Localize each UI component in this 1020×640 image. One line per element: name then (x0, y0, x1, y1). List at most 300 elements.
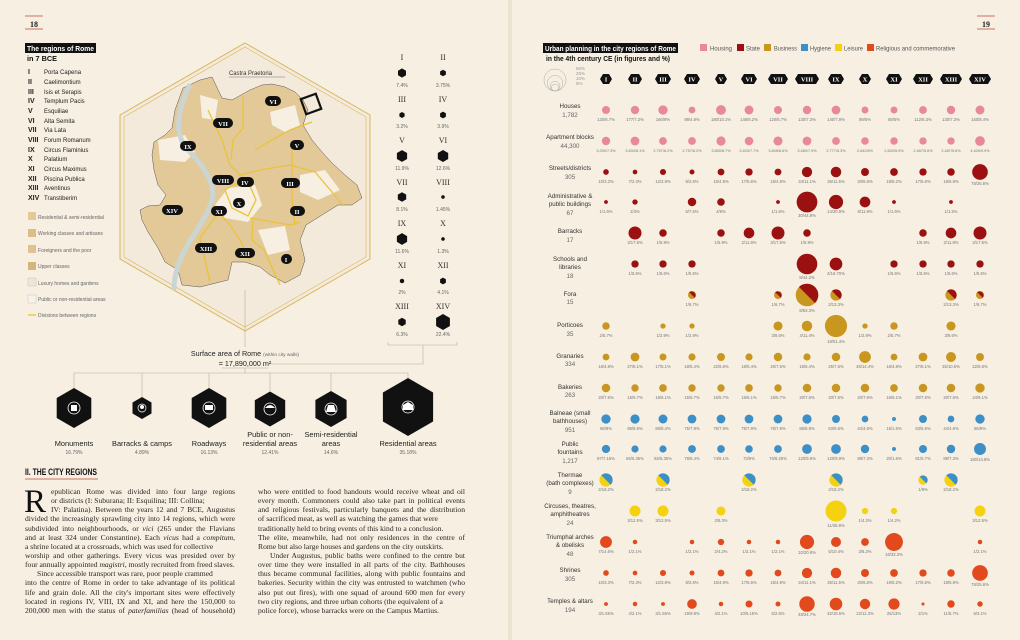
text column 2: and religious festivals, particularly banquets and the distribution (258, 505, 465, 514)
row: public fountains: 20/1.6% (886, 456, 902, 461)
row: bakeries: 20/7.6% (598, 395, 614, 400)
row labels: & obelisks (556, 542, 584, 549)
legend: region names: Isis et Serapis (44, 90, 82, 96)
row: schools: 1/5.6% (685, 271, 699, 276)
row: barracks: 2/11.8% (741, 240, 757, 245)
row: temples: 4/2.1% (628, 611, 642, 616)
row labels: Balneae (small (550, 410, 590, 417)
region share hexagons (395, 53, 451, 338)
row: schools: 3/16.70% (827, 271, 845, 276)
region share hexagons: 11.9% (395, 166, 409, 172)
row: shrines: 20/6.6% (857, 580, 873, 585)
land use hexagons: Semi-residential (304, 430, 358, 439)
row: fora (685, 284, 987, 313)
land use hexagons: 35.18% (400, 450, 417, 456)
row: triumphal arches: 16/33.3% (885, 552, 903, 557)
legend: region names: IX (28, 147, 35, 154)
row: bakeries: 15/5.7% (713, 395, 729, 400)
row labels: 24 (567, 520, 574, 527)
row: triumphal arches (598, 533, 987, 557)
legend: region names: Templum Pacis (44, 99, 85, 105)
row: houses: 140/7.9% (827, 117, 845, 122)
row: administrative: 2/3% (630, 209, 640, 214)
row: apartment blocks: 3,480/7.9% (797, 149, 817, 153)
size legend circles (544, 66, 585, 91)
legend: land use swatches: Public or non-residential areas (38, 297, 106, 303)
row: bakeries: 20/7.6% (857, 395, 873, 400)
text column 1: worship and other gatherings. Every vicus was presided over by (25, 551, 235, 560)
row labels: 263 (565, 392, 576, 399)
text column 1: four annually appointed magistri, mostly recruited from freed slaves. (25, 560, 235, 569)
row: schools: 1/5.6% (656, 271, 670, 276)
land use hexagons: 12.41% (262, 450, 279, 456)
legend: region names (28, 69, 91, 202)
text column 1: divided the increasingly sprawling city into 14 regions, which were (25, 514, 235, 523)
text column 1: life and grain dole. All the city's important sites were effectively (25, 588, 235, 597)
row: administrative: 8/11.9% (857, 209, 873, 214)
row: public fountains: 74/6.1% (713, 456, 729, 461)
row: schools (628, 254, 987, 280)
row: shrines: 35/11.5% (827, 580, 845, 585)
text column 1: 200,000 men with the status of paterfamilias (head of household) (25, 606, 235, 615)
row: administrative: 5/7.5% (685, 209, 699, 214)
row: public fountains: 73/6% (743, 456, 755, 461)
legend: land use swatches: Luxury homes and gardens (38, 281, 99, 287)
row: fora: 1/6.7% (771, 302, 785, 307)
row: barracks: 1/5.9% (656, 240, 670, 245)
row: granaries: 35/10.5% (942, 364, 960, 369)
row: bakeries: 20/7.6% (943, 395, 959, 400)
row: thermae: 2/18.2% (741, 487, 757, 492)
row: streets: 15/4.9% (713, 179, 729, 184)
region header badges: VIII (801, 76, 814, 84)
row labels: 951 (565, 427, 576, 434)
row: shrines: 8/2.6% (685, 580, 699, 585)
row: barracks (627, 226, 988, 245)
text column 2 (258, 487, 466, 615)
row: balneae: 85/8.9% (799, 426, 815, 431)
region share hexagons: VIII (436, 178, 450, 187)
row: public fountains (597, 443, 990, 462)
row: temples: 25/13% (887, 611, 901, 616)
row labels: Fora (564, 291, 577, 298)
row labels: Triumphal arches (546, 534, 594, 541)
legend: region names: Porta Capena (44, 70, 82, 76)
row: shrines: 17/5.6% (915, 580, 931, 585)
row labels: Houses (560, 103, 580, 110)
row: shrines: 19/6.2% (886, 580, 902, 585)
legend: region names: II (28, 79, 32, 86)
row: streets: 7/2.3% (628, 179, 642, 184)
region header badges (600, 74, 991, 84)
text column 2: over time they were installed in all parts of the city. Bathhouses (258, 560, 465, 569)
row: public fountains: 120/9.9% (827, 456, 845, 461)
row: triumphal arches: 7/14.6% (598, 549, 614, 554)
row: porticoes: 2/5.7% (887, 333, 901, 338)
region header badges: X (863, 76, 868, 84)
region share hexagons: IV (439, 95, 447, 104)
region header badges: VII (773, 76, 783, 84)
drop cap: R (24, 484, 46, 520)
map of Rome in hexagon: II (294, 209, 300, 216)
legend: region names: Circus Maximus (44, 167, 87, 173)
map of Rome in hexagon: IX (184, 144, 192, 151)
legend: region names: Aventinus (44, 186, 70, 192)
legend: land use swatches: Working classes and artisans (38, 231, 103, 237)
region share hexagons: 1.45% (436, 207, 451, 213)
land use hexagons: Monuments (55, 439, 94, 448)
legend: region names: XIV (28, 195, 40, 202)
row: porticoes: 18/51.4% (827, 339, 845, 344)
legend: land use swatches: Residential & semi-residential (38, 215, 104, 221)
row labels: amphitheatres (550, 511, 590, 518)
row labels: Schools and (553, 256, 588, 263)
row: temples: 11/5.7% (943, 611, 959, 616)
row: temples: 32/16.5% (827, 611, 845, 616)
row labels: 48 (567, 551, 574, 558)
row: temples: 22/11.3% (856, 611, 874, 616)
row: triumphal arches: 1/2.1% (973, 549, 987, 554)
legend: region names: V (28, 108, 33, 115)
region header badges: V (719, 76, 724, 84)
row: fora: 1/6.7% (685, 302, 699, 307)
icon hex: barracks (132, 397, 152, 419)
row: shrines: 78/25.6% (971, 582, 989, 587)
row labels: Thermae (558, 472, 583, 479)
row: bakeries: 20/7.6% (915, 395, 931, 400)
row: circuses (627, 501, 988, 528)
row: streets: 20/6.6% (857, 179, 873, 184)
row labels: 305 (565, 576, 576, 583)
legend: region names: Caelimontium (44, 80, 81, 86)
text column 2: of sacrificed meat, as well as watching the games that were (258, 514, 438, 523)
text column 1: located in regions IV, VIII, IX and XI, and here the 150,000 to (25, 597, 235, 606)
size legend circles: 50% (576, 66, 585, 71)
region header badges: I (605, 76, 608, 84)
legend: region names: IV (28, 98, 35, 105)
legend: region names: X (28, 156, 33, 163)
region share hexagons: X (440, 219, 446, 228)
surface area label: Surface area of Rome (within city walls) (191, 349, 300, 358)
land use hexagons: Barracks & camps (112, 439, 172, 448)
row labels: 44,300 (561, 143, 580, 150)
row: balneae: 75/7.9% (741, 426, 757, 431)
row: public fountains: 76/6.25% (769, 456, 787, 461)
icon hex: residential (383, 378, 433, 436)
region share hexagons: 4.1% (437, 290, 449, 296)
region share hexagons: VII (396, 178, 408, 187)
row: streets: 15/4.9% (770, 179, 786, 184)
row: streets: 35/11.5% (827, 179, 845, 184)
row: bakeries: 24/9.1% (972, 395, 988, 400)
row: triumphal arches: 2/4.2% (714, 549, 728, 554)
row: public fountains: 65/5.35% (654, 456, 672, 461)
row: public fountains: 180/14.8% (970, 457, 990, 462)
row: apartment blocks: 3,403/7.7% (739, 149, 759, 153)
colour legend: Housing (710, 46, 732, 52)
right page title: Urban planning in the city regions of Rome (545, 44, 676, 53)
page number 18 (25, 16, 43, 29)
row: barracks: 1/5.9% (800, 240, 814, 245)
size legend circles: 5% (576, 81, 583, 86)
row labels: Bakeries (558, 384, 582, 391)
row labels: (bath complexes) (546, 480, 594, 487)
row labels: 1,782 (562, 112, 578, 119)
row: temples (598, 596, 987, 617)
row: temples: 5/2.6% (771, 611, 785, 616)
row: bakeries: 15/5.7% (627, 395, 643, 400)
row: balneae (600, 414, 986, 431)
row labels: Barracks (558, 228, 582, 235)
row: granaries: 27/8.1% (915, 364, 931, 369)
row: administrative: 1/1.5% (887, 209, 901, 214)
row: houses: 89/5% (888, 117, 900, 122)
row: balneae: 85/8.9% (627, 426, 643, 431)
row: apartment blocks: 2,642/6% (857, 149, 874, 153)
row: streets: 78/25.6% (971, 181, 989, 186)
row: houses: 120/6.7% (769, 117, 787, 122)
row: bakeries: 20/7.6% (828, 395, 844, 400)
row: barracks: 3/17.6% (627, 240, 643, 245)
legend: region names: III (28, 89, 34, 96)
row: apartment blocks (596, 136, 990, 153)
region share hexagons: 3.75% (436, 83, 451, 89)
row: apartment blocks: 2,757/6.2% (682, 149, 702, 153)
row labels: 18 (567, 273, 574, 280)
icon hex: public areas (255, 392, 285, 426)
row labels: 9 (568, 489, 572, 496)
legend: region names: VI (28, 118, 35, 125)
text column 1: Since accessible transport was rare, poor people crammed (37, 569, 213, 578)
row: houses: 130/7.3% (942, 117, 960, 122)
colour legend: Leisure (844, 46, 864, 52)
row labels (544, 103, 596, 614)
region share hexagons: I (401, 53, 404, 62)
row labels: 194 (565, 607, 576, 614)
icon hex: roadways (192, 388, 226, 428)
legend: land use swatches: Divisions between regions (38, 313, 97, 319)
row: porticoes: 4/11.4% (799, 333, 815, 338)
row labels: Administrative & (548, 193, 593, 200)
row: triumphal arches: 3/6.2% (858, 549, 872, 554)
row: shrines (598, 565, 989, 587)
row: shrines: 15/4.9% (770, 580, 786, 585)
row: temples: 6/3.1% (973, 611, 987, 616)
row: schools: 1/5.6% (944, 271, 958, 276)
section heading (25, 467, 98, 479)
legend: region names: Palatium (44, 157, 67, 163)
row labels: 1,217 (562, 458, 578, 465)
text column 2: bakeries. Security within the city was entrusted to watchmen (who (258, 578, 465, 587)
land use hexagons: 16.13% (201, 450, 218, 456)
map of Rome in hexagon: XII (240, 251, 250, 258)
region share hexagons: III (398, 95, 406, 104)
row: thermae: 2/18.2% (598, 487, 614, 492)
row: fora: 1/6.7% (973, 302, 987, 307)
row: streets: 17/5.6% (915, 179, 931, 184)
row: schools: 1/5.6% (916, 271, 930, 276)
surface area label: = 17,890,000 m² (219, 359, 272, 368)
row: porticoes (599, 315, 958, 344)
row: barracks: 2/11.8% (943, 240, 959, 245)
legend: region names: VII (28, 127, 37, 134)
text column 2: police force), whose barracks were on the Campus Martius. (258, 606, 439, 615)
map of Rome in hexagon: IV (241, 180, 249, 187)
row: circuses: 1/4.2% (858, 518, 872, 523)
row: circuses: 3/12.5% (972, 518, 988, 523)
text column 1: a shrine located at a crossroads, which was used for collective (25, 542, 213, 551)
row: balneae: 63/6.6% (915, 426, 931, 431)
row: fora: 2/13.3% (828, 302, 844, 307)
region share hexagons: XI (398, 261, 407, 270)
row: shrines: 34/11.1% (798, 580, 816, 585)
text column 1: into the centre of Rome in order to take advantage of its political (25, 578, 235, 587)
row labels: Circuses, theatres, (544, 503, 596, 510)
row: houses: 160/9% (656, 117, 670, 122)
row: barracks: 3/17.6% (972, 240, 988, 245)
row: public fountains: 87/7.15% (597, 456, 615, 461)
row: houses: 89/5% (859, 117, 871, 122)
text column 1: or districts (I: Suburana; II: Esquilina; III: Collina; (51, 496, 205, 505)
row: apartment blocks: 3,600/8.1% (625, 149, 645, 153)
region share hexagons: 11.6% (395, 249, 409, 255)
row labels: Public (562, 441, 578, 448)
row: balneae: 44/4.6% (943, 426, 959, 431)
row: circuses: 11/45.8% (827, 523, 845, 528)
row: apartment blocks: 3,850/8.7% (711, 149, 731, 153)
row: shrines: 17/5.6% (741, 580, 757, 585)
legend: region names: XII (28, 176, 37, 183)
row: granaries: 18/5.4% (741, 364, 757, 369)
legend: region names: Alta Semita (44, 119, 75, 125)
colour legend: Business (774, 46, 797, 52)
legend: region names: I (28, 69, 30, 76)
region share hexagons: 3.9% (437, 124, 449, 130)
land use hexagons: Public or non- (247, 430, 293, 439)
region share hexagons: 2% (398, 290, 406, 296)
region header badges: III (659, 76, 667, 84)
row: granaries: 48/14.4% (856, 364, 874, 369)
row labels: Granaries (556, 353, 584, 360)
row labels: Streets/districts (549, 165, 591, 172)
legend: region names: XIII (28, 185, 39, 192)
row: apartment blocks: 2,487/5.6% (913, 149, 933, 153)
text column 2: who were entitled to food handouts would receive wheat and oil (258, 487, 465, 496)
row: bakeries: 15/5.7% (770, 395, 786, 400)
text column 1: epublican Rome was divided into four large regions (51, 487, 235, 496)
row: granaries: 17/5.1% (655, 364, 671, 369)
row: shrines: 15/4.9% (713, 580, 729, 585)
colour legend: Hygiene (810, 46, 832, 52)
row: granaries: 27/8.1% (627, 364, 643, 369)
page number 18: 18 (30, 20, 38, 29)
legend: region names: Piscina Publica (44, 177, 85, 183)
row: bakeries: 16/6.1% (655, 395, 671, 400)
row: balneae: 86/9% (600, 426, 612, 431)
row: barracks: 3/17.6% (770, 240, 786, 245)
row: public fountains: 120/9.9% (798, 456, 816, 461)
row: streets: 8/2.6% (685, 179, 699, 184)
row: granaries: 18/5.4% (799, 364, 815, 369)
row: houses: 88/4.9% (684, 117, 700, 122)
row: houses: 150/8.4% (971, 117, 989, 122)
row: bakeries: 16/6.1% (741, 395, 757, 400)
row: shrines: 10/3.3% (598, 580, 614, 585)
text column 1: and at least 324 under Constantine). Each vicus had a compitum, (25, 533, 235, 542)
text column 2: thus became communal facilities, along with public fountains and (258, 569, 465, 578)
section heading: II. THE CITY REGIONS (25, 467, 97, 478)
legend: region names: XI (28, 166, 35, 173)
row: porticoes: 1/2.9% (685, 333, 699, 338)
region share hexagons: 1.3% (437, 249, 449, 255)
row: thermae: 2/18.2% (655, 487, 671, 492)
row: balneae: 15/1.6% (886, 426, 902, 431)
row: thermae (598, 473, 959, 492)
row: apartment blocks: 3,805/8.6% (768, 149, 788, 153)
row: houses: 112/6.3% (914, 117, 932, 122)
colour legend: State (746, 46, 761, 52)
row: temples: 10/5.15% (740, 611, 758, 616)
region header badges: VI (745, 76, 753, 84)
row: houses: 177/7.2% (626, 117, 644, 122)
surface area label (191, 349, 300, 368)
row: streets: 12/3.9% (655, 179, 671, 184)
row: triumphal arches: 1/2.1% (685, 549, 699, 554)
map of Rome in hexagon: XIII (200, 246, 213, 253)
region share hexagons: 8.1% (396, 207, 408, 213)
row: porticoes: 1/2.9% (858, 333, 872, 338)
page number 19 (977, 16, 995, 29)
row labels: Shrines (560, 567, 580, 574)
row: streets: 18/5.9% (943, 179, 959, 184)
land use hexagons: residential areas (243, 439, 297, 448)
row: streets: 17/5.6% (741, 179, 757, 184)
row: temples: 3/1.55% (655, 611, 671, 616)
row: granaries: 22/6.6% (972, 364, 988, 369)
colour legend: Religious and commemorative (876, 46, 956, 52)
land use hexagons (55, 378, 437, 456)
row labels: bathhouses) (553, 418, 587, 425)
legend: region names: Via Lata (44, 128, 67, 134)
icon hex: semi-residential (315, 391, 347, 427)
right page title: in the 4th century CE (in figures and %) (546, 54, 671, 63)
row: circuses: 1/4.2% (887, 518, 901, 523)
row: houses: 180/10.1% (711, 117, 731, 122)
row: houses (597, 105, 989, 122)
legend: region names: Esquiliae (44, 109, 69, 115)
text column 1: IV: Palatina). Between the years 12 and 7 BCE, Augustus (51, 505, 235, 514)
region share hexagons: XII (437, 261, 449, 270)
region share hexagons: IX (398, 219, 406, 228)
row labels: 334 (565, 361, 576, 368)
text column 1 (25, 487, 235, 615)
row labels: Porticoes (557, 322, 583, 329)
row: granaries: 22/6.6% (713, 364, 729, 369)
row: bakeries (598, 383, 988, 400)
row: administrative: 1/1.5% (771, 209, 785, 214)
row: temples: 3/1.55% (598, 611, 614, 616)
map of Rome in hexagon: XI (215, 209, 223, 216)
row: streets: 19/6.2% (886, 179, 902, 184)
row: circuses: 3/12.5% (655, 518, 671, 523)
row: balneae: 75/7.9% (684, 426, 700, 431)
row: granaries: 16/4.8% (886, 364, 902, 369)
row: public fountains: 81/6.7% (915, 456, 931, 461)
text column 2: traditionally held to bring events of this kind to a conclusion. (258, 524, 443, 533)
title: regions of Rome: The regions of Rome (27, 44, 94, 53)
row: public fountains: 65/5.35% (626, 456, 644, 461)
row: apartment blocks: 2,777/6.3% (826, 149, 846, 153)
